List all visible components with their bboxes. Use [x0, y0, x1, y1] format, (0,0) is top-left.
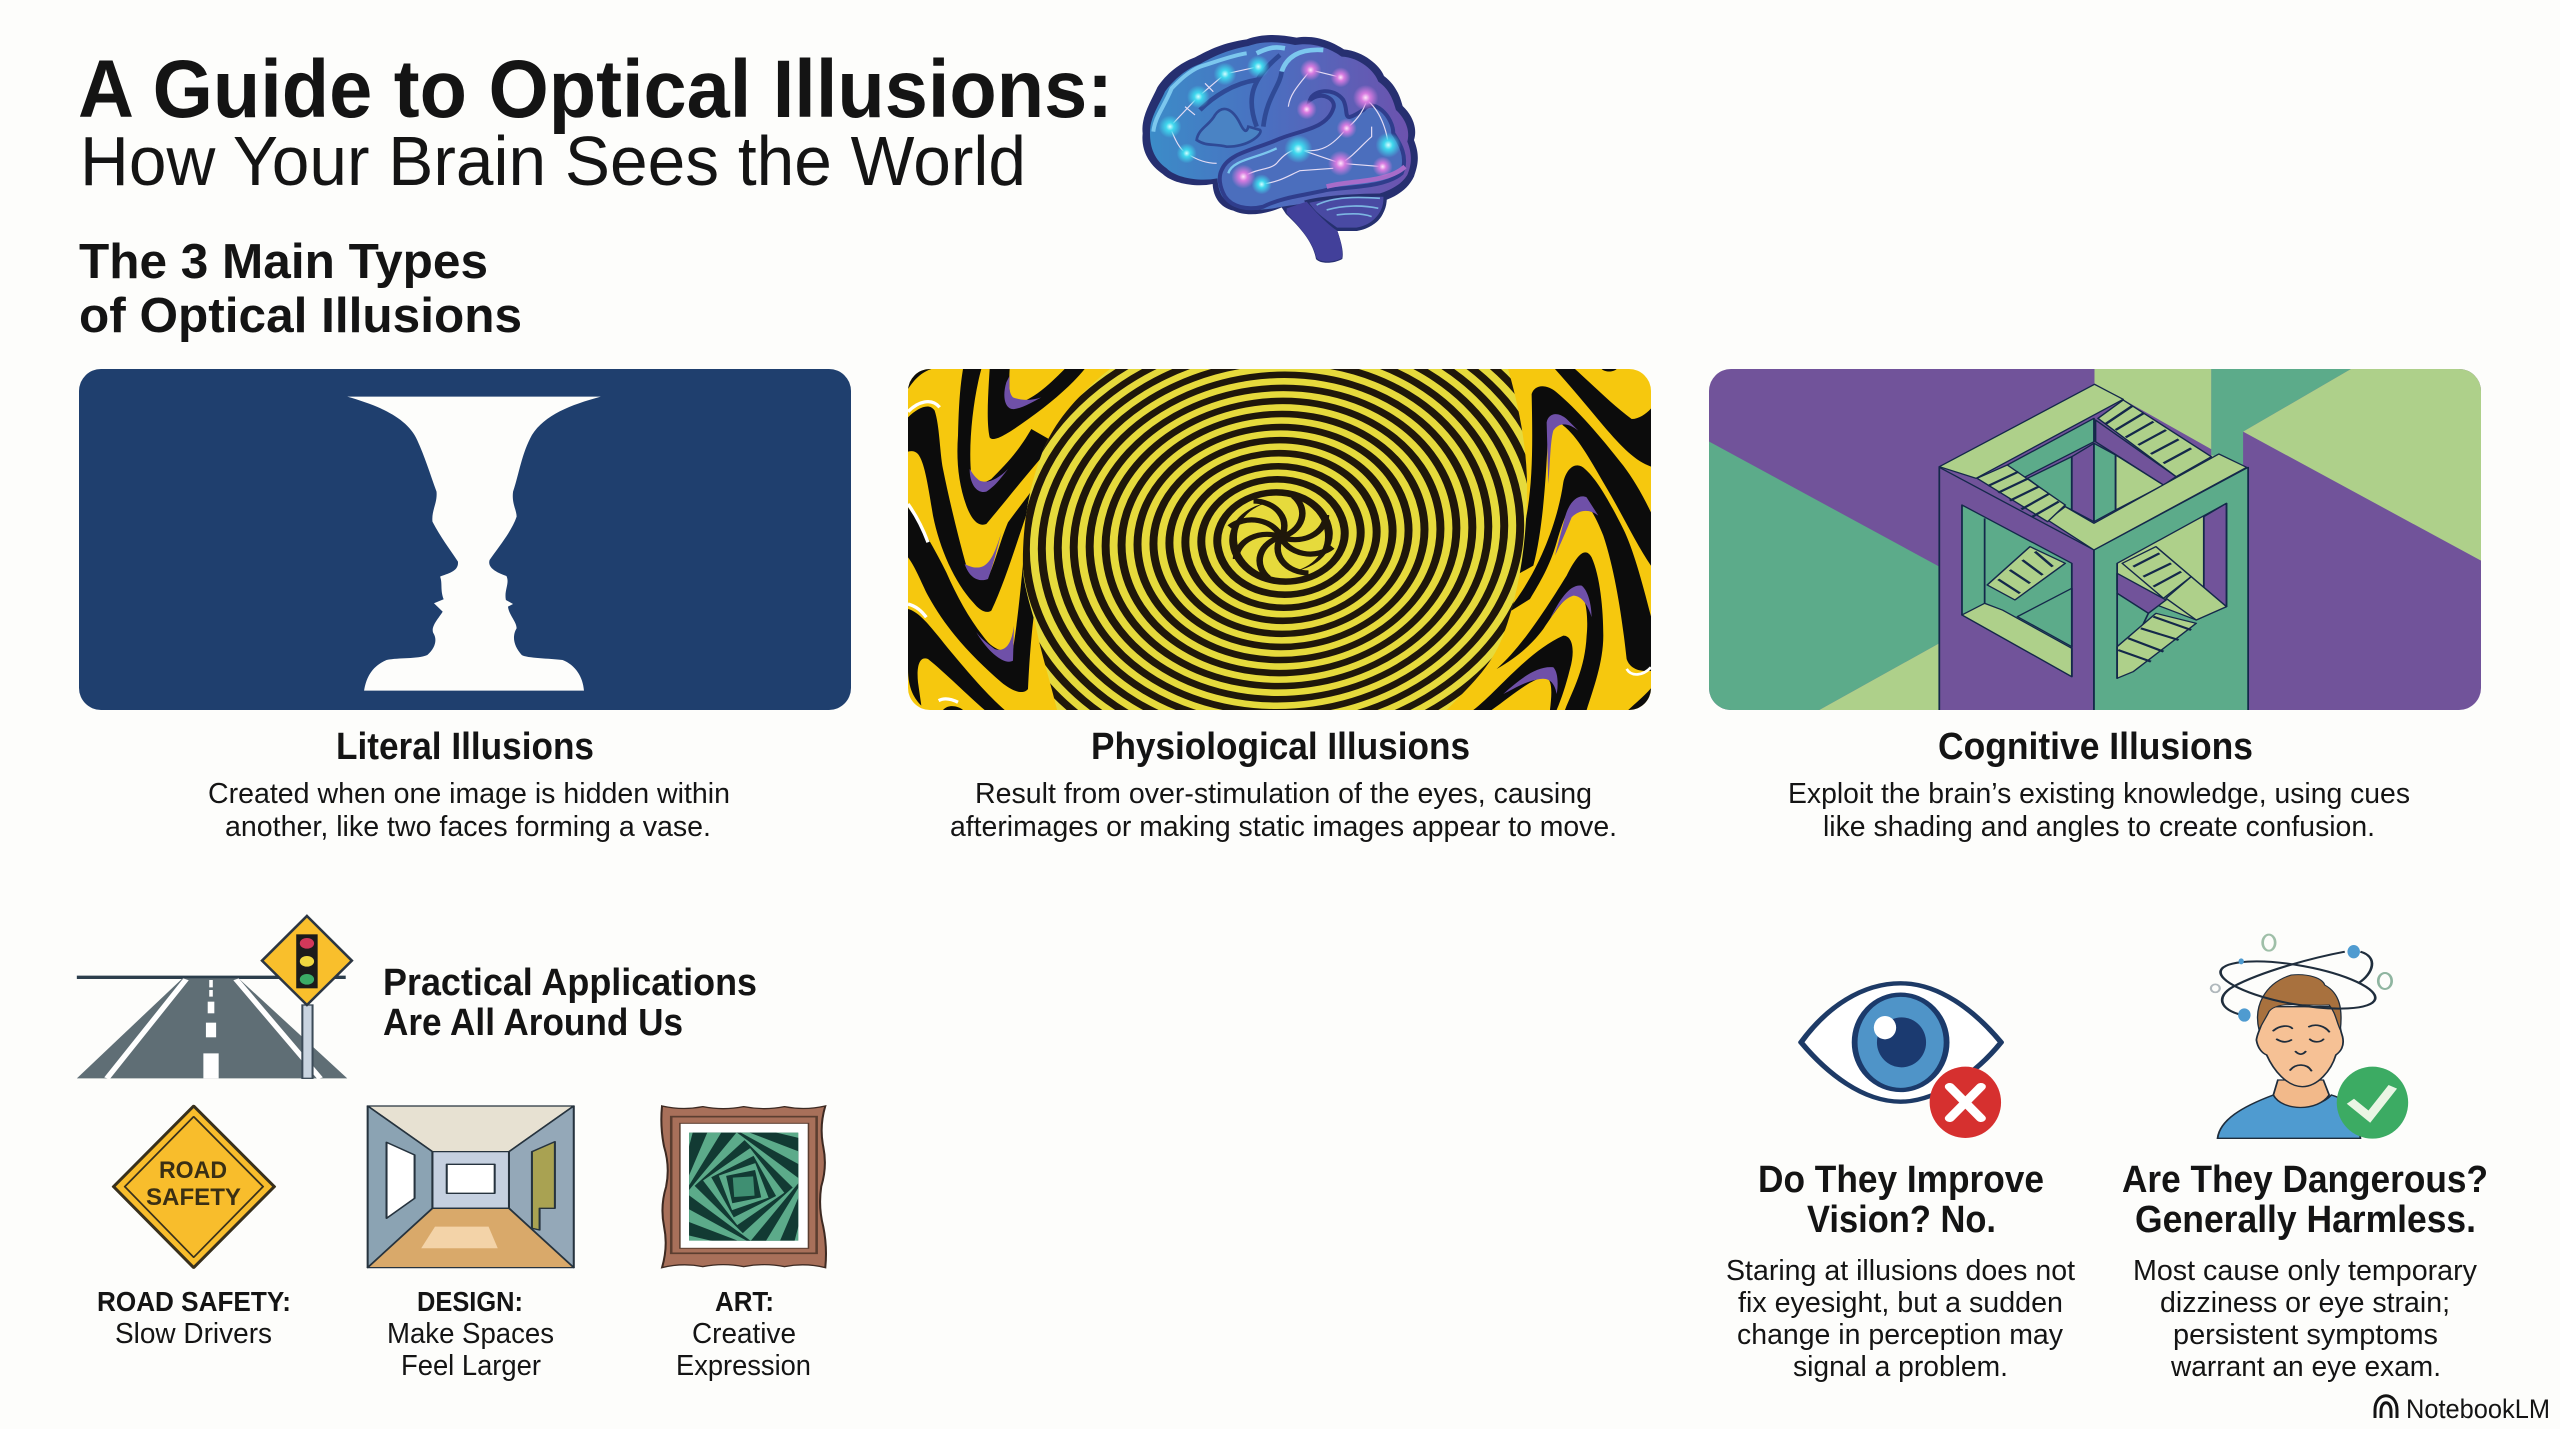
physiological illusions caption: Result from over-stimulation of the eyes, causing: [975, 778, 1592, 810]
danger question block: Most cause only temporary: [2133, 1255, 2477, 1287]
literal illusions caption: Created when one image is hidden within: [208, 778, 730, 810]
vision question block: Do They Improve: [1758, 1159, 2044, 1201]
icon: dizzy person with green check: [2211, 935, 2408, 1139]
vision question block: change in perception may: [1737, 1319, 2063, 1351]
cognitive illusions caption: like shading and angles to create confusion.: [1823, 811, 2375, 843]
vision question block: signal a problem.: [1793, 1351, 2008, 1383]
panel: physiological spiral: [908, 369, 1651, 710]
vision question block: Staring at illusions does not: [1726, 1255, 2075, 1287]
cognitive illusions caption: [1788, 726, 2410, 843]
icon: room interior: [368, 1106, 574, 1268]
icon: road safety sign: ROAD: [159, 1157, 227, 1184]
section heading: main types: The 3 Main Types: [79, 235, 488, 289]
danger question block: persistent symptoms: [2173, 1319, 2438, 1351]
art caption: Creative: [692, 1318, 796, 1350]
icon: framed op art: [661, 1106, 826, 1268]
vision question block: Vision? No.: [1807, 1199, 1996, 1241]
section heading: main types: [79, 235, 522, 343]
title line 2: How Your Brain Sees the World: [80, 122, 1026, 200]
NotebookLM watermark: NotebookLM: [2406, 1394, 2550, 1424]
heading: practical applications: [383, 962, 757, 1044]
danger question block: warrant an eye exam.: [2170, 1351, 2441, 1383]
heading: practical applications: Are All Around Us: [383, 1002, 683, 1044]
art caption: ART:: [715, 1286, 774, 1317]
heading: practical applications: Practical Applications: [383, 962, 757, 1004]
literal illusions caption: another, like two faces forming a vase.: [225, 811, 711, 843]
cognitive illusions caption: Exploit the brain’s existing knowledge, using cues: [1788, 778, 2410, 810]
design caption: DESIGN:: [417, 1286, 523, 1317]
road safety caption: Slow Drivers: [115, 1318, 272, 1350]
icon: road safety sign: SAFETY: [146, 1184, 241, 1211]
icon: road safety sign: [114, 1106, 274, 1268]
physiological illusions caption: afterimages or making static images appear to move.: [950, 811, 1617, 843]
physiological illusions caption: [950, 726, 1617, 843]
danger question block: Are They Dangerous?: [2122, 1159, 2488, 1201]
literal illusions caption: [208, 726, 730, 843]
vision question block: [1726, 1159, 2075, 1383]
icon: glowing brain: [1142, 35, 1418, 263]
physiological illusions caption: Physiological Illusions: [1091, 726, 1470, 768]
panel: cognitive impossible cube: [1705, 367, 2486, 713]
panel: literal illusion faces and vase: [79, 369, 851, 710]
design caption: Make Spaces: [387, 1318, 554, 1350]
danger question block: [2122, 1159, 2488, 1383]
danger question block: Generally Harmless.: [2135, 1199, 2476, 1241]
icon: road with traffic sign: [77, 916, 352, 1078]
danger question block: dizziness or eye strain;: [2160, 1287, 2450, 1319]
title line 1: A Guide to Optical Illusions:: [78, 44, 1113, 135]
title: [78, 44, 1113, 200]
road safety caption: ROAD SAFETY:: [97, 1286, 291, 1317]
vision question block: fix eyesight, but a sudden: [1738, 1287, 2063, 1319]
literal illusions caption: Literal Illusions: [336, 726, 594, 768]
road safety caption: [97, 1286, 291, 1350]
icon: eye with red cross: [1801, 983, 2001, 1138]
cognitive illusions caption: Cognitive Illusions: [1938, 726, 2253, 768]
section heading: main types: of Optical Illusions: [79, 289, 522, 343]
design caption: Feel Larger: [401, 1350, 541, 1382]
art caption: [676, 1286, 811, 1382]
art caption: Expression: [676, 1350, 811, 1382]
design caption: [387, 1286, 554, 1382]
